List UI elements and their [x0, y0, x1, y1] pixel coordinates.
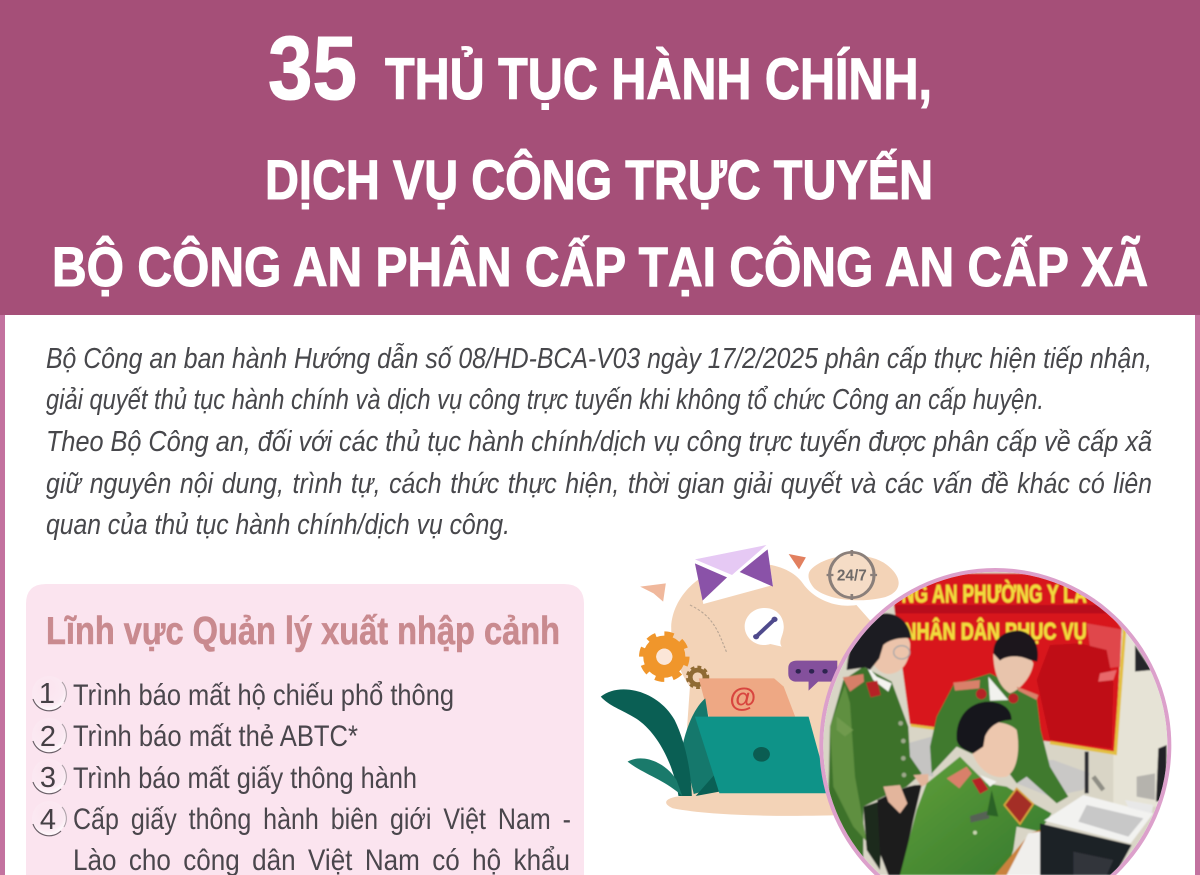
papers behind [907, 737, 933, 777]
officer left [827, 667, 922, 875]
intro paragraph: quan của thủ tục hành chính/dịch vụ công. [46, 509, 510, 541]
plant leaves [601, 689, 719, 796]
title number 35: 35 [268, 19, 357, 119]
wall [820, 570, 1170, 875]
red banner [890, 573, 1122, 752]
item 1: Trình báo mất hộ chiếu phổ thông [73, 679, 454, 712]
item 4: Cấp giấy thông hành biên giới Việt Nam - [73, 803, 571, 836]
title line 1: THỦ TỤC HÀNH CHÍNH, [385, 47, 932, 112]
item 1: 1 [39, 678, 55, 710]
officer back [930, 673, 1068, 803]
photo: police officers [819, 568, 1171, 875]
blob background [666, 563, 876, 816]
icon: 24/7 clock: 24/7 [837, 568, 867, 585]
title line 2: DỊCH VỤ CÔNG TRỰC TUYẾN [265, 148, 933, 211]
panel: immigration management [26, 584, 584, 875]
item 2: Trình báo mất thẻ ABTC* [73, 720, 358, 753]
header banner [0, 0, 1200, 315]
intro paragraph [46, 342, 1152, 541]
item 4: 4 [40, 804, 56, 836]
right wall items [1135, 645, 1152, 672]
icon: 24/7 clock [827, 550, 877, 600]
item 4 [32, 801, 571, 875]
laptop [695, 717, 830, 793]
item 2: 2 [40, 721, 56, 753]
item 3: 3 [40, 762, 56, 794]
clock blob [808, 555, 899, 600]
icon: chat bubble [788, 661, 837, 691]
icon: email card: @ [729, 682, 756, 713]
photo: police officers: NHÂN DÂN PHỤC VỤ [903, 617, 1087, 645]
banner text: NG AN PHƯỜNG Y LA [902, 579, 1087, 609]
icon: small gear [687, 667, 708, 688]
icon: wrench bubble [745, 608, 784, 647]
item 3: Trình báo mất giấy thông hành [73, 762, 417, 795]
icon: paper planes [640, 554, 806, 602]
desk and documents [995, 830, 1040, 875]
illustration: online services [601, 545, 899, 816]
icon: envelope [695, 545, 773, 604]
panel heading: Lĩnh vực Quản lý xuất nhập cảnh [46, 610, 560, 653]
officer front [900, 757, 1052, 875]
icon: orange gear [642, 634, 687, 679]
dashed orbit [690, 605, 727, 653]
icon: email card [699, 678, 795, 717]
